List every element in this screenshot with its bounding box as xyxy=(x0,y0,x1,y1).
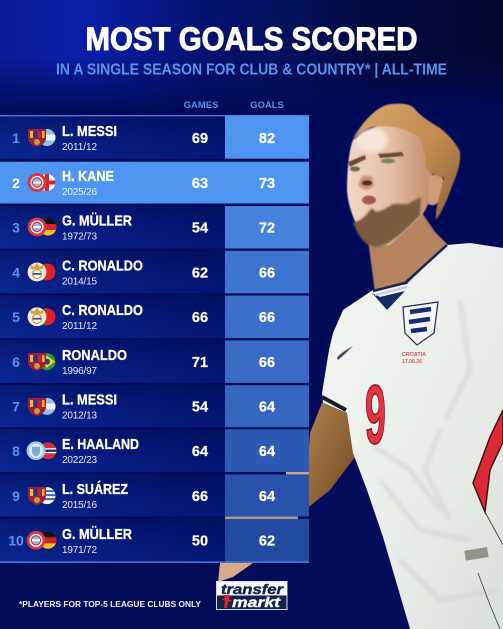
row 6: RONALDO xyxy=(62,348,127,364)
row 8: 2022/23 xyxy=(62,455,97,466)
table xyxy=(0,100,309,563)
row 3: 54 xyxy=(192,220,208,236)
sleeve cuff xyxy=(322,397,346,410)
shirt tag xyxy=(464,547,489,561)
row 5: 66 xyxy=(259,310,275,326)
number 9: 9 xyxy=(365,367,386,461)
row 3: 3 xyxy=(12,220,20,236)
row 1: 1 xyxy=(12,130,20,146)
row 3: G. MÜLLER xyxy=(62,212,132,230)
footnote: *PLAYERS FOR TOP-5 LEAGUE CLUBS ONLY xyxy=(19,599,201,609)
row 8: E. HAALAND xyxy=(62,437,139,453)
nose xyxy=(358,176,374,190)
row 2: 73 xyxy=(259,176,275,192)
row 5: C. RONALDO xyxy=(62,303,143,319)
row 7: 54 xyxy=(192,400,208,416)
player photo: Harry Kane xyxy=(218,104,503,629)
row 2: H. KANE xyxy=(62,169,114,185)
row 5: 5 xyxy=(12,309,20,325)
logo: transfermarkt xyxy=(216,581,287,610)
row 2: 63 xyxy=(192,176,208,192)
row 9: 66 xyxy=(192,489,208,505)
row 4: 66 xyxy=(259,265,275,281)
row 6: 1996/97 xyxy=(62,366,97,377)
row 8: 64 xyxy=(259,444,275,460)
eyes and brows xyxy=(348,152,404,172)
row 1: 2011/12 xyxy=(62,142,97,153)
match text xyxy=(402,352,426,365)
row 6: 71 xyxy=(192,355,208,371)
nostril xyxy=(362,180,372,186)
row 7: 7 xyxy=(12,398,20,414)
match text: CROATIA xyxy=(402,352,426,358)
row 2 xyxy=(0,162,309,204)
row 5 xyxy=(0,296,309,338)
row 9 xyxy=(0,474,309,516)
row 10: 1971/72 xyxy=(62,545,97,556)
row 4: C. RONALDO xyxy=(62,258,143,274)
row 5: 2011/12 xyxy=(62,321,97,332)
row 8 xyxy=(0,429,309,472)
row 8: 8 xyxy=(12,443,20,459)
row 6 xyxy=(0,340,309,383)
row 1: 69 xyxy=(192,131,208,147)
column header: goals: GOALS xyxy=(250,100,284,111)
mouth xyxy=(362,196,376,204)
collar xyxy=(372,245,447,310)
beard xyxy=(353,197,421,247)
row 9: 2015/16 xyxy=(62,500,97,511)
row 6: 6 xyxy=(12,354,20,370)
row 10: 10 xyxy=(8,532,24,548)
match text: 17.06.26 xyxy=(402,359,422,365)
row 10: 62 xyxy=(259,534,275,550)
row 1: L. MESSI xyxy=(62,124,117,140)
row 3: 1972/73 xyxy=(62,232,97,242)
row 2: 2 xyxy=(12,175,20,191)
row 3 xyxy=(0,206,309,248)
swoosh xyxy=(337,346,353,360)
row 7: 64 xyxy=(259,400,275,416)
row 3: 72 xyxy=(259,220,275,236)
row 4 xyxy=(0,251,309,293)
row 9: 64 xyxy=(259,489,275,505)
ear xyxy=(428,174,444,205)
shirt xyxy=(322,243,503,629)
neck xyxy=(368,210,449,292)
row 8: 64 xyxy=(192,444,208,460)
side stripe xyxy=(473,410,503,512)
row 10 xyxy=(0,519,309,562)
logo: transfermarkt: markt xyxy=(232,594,282,610)
row 7 xyxy=(0,385,309,427)
row 7: L. MESSI xyxy=(62,393,117,409)
row 4: 62 xyxy=(192,265,208,281)
England crest xyxy=(403,302,438,345)
row 1: 82 xyxy=(259,131,275,147)
arm and hand xyxy=(218,403,355,582)
row 9: L. SUÁREZ xyxy=(62,481,128,498)
row 2: 2025/26 xyxy=(62,187,97,198)
row 6: 66 xyxy=(259,355,275,371)
hair xyxy=(353,104,460,220)
row 4: 2014/15 xyxy=(62,276,97,287)
row 4: 4 xyxy=(12,264,20,280)
face xyxy=(347,118,432,247)
row 9: 9 xyxy=(12,488,20,504)
row 7: 2012/13 xyxy=(62,411,97,422)
logo: transfermarkt: transfer xyxy=(221,581,285,597)
shirt wrinkles xyxy=(372,300,500,600)
subtitle: IN A SINGLE SEASON FOR CLUB & COUNTRY* | ALL-TIME xyxy=(56,62,447,78)
column header: games: GAMES xyxy=(184,100,218,111)
row 10: 50 xyxy=(192,534,208,550)
row 5: 66 xyxy=(192,310,208,326)
forehead highlight xyxy=(356,128,388,152)
seam lines xyxy=(478,512,503,629)
row 1 xyxy=(0,116,309,159)
row 10: G. MÜLLER xyxy=(62,526,132,543)
title: MOST GOALS SCORED xyxy=(86,21,418,57)
